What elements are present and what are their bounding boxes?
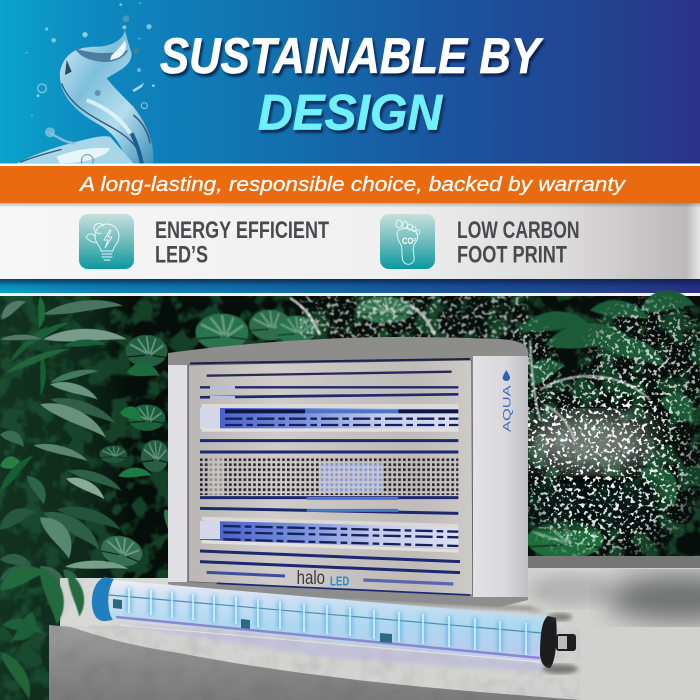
panel: features band <box>0 203 700 279</box>
icon: carbon footprint: CO² <box>402 236 416 246</box>
feature label: carbon: LOW CARBON <box>457 217 580 244</box>
feature label: energy: ENERGY EFFICIENT <box>155 217 329 244</box>
title <box>160 28 544 140</box>
product: halo LED fly trap <box>92 337 578 674</box>
foliage behind device top <box>195 296 528 350</box>
band drop shadow <box>0 279 700 293</box>
halo LED logo <box>297 568 350 589</box>
header banner background <box>0 0 700 296</box>
halo LED logo: LED <box>330 573 350 588</box>
tube body <box>109 580 547 663</box>
title: SUSTAINABLE BY <box>160 28 544 84</box>
icon: energy efficient bulb <box>79 214 134 269</box>
black end cap with connector <box>540 613 578 674</box>
photo: garden scene <box>0 286 700 700</box>
feature label: carbon <box>457 217 580 268</box>
perforated section <box>200 458 458 495</box>
product: LED tube <box>92 577 578 674</box>
tube LED glow <box>129 588 526 655</box>
tube reflection <box>110 622 542 672</box>
device shadow <box>168 585 545 612</box>
tube LED lines <box>129 588 526 655</box>
feature label: carbon: FOOT PRINT <box>457 242 567 268</box>
right foliage <box>518 286 700 558</box>
blue end cap <box>92 577 114 621</box>
upper light window <box>200 404 458 432</box>
device housing <box>168 337 528 607</box>
device grille panel <box>188 359 514 595</box>
title: DESIGN <box>258 84 443 140</box>
foreground leaves over ledge <box>0 558 90 699</box>
icon: carbon footprint <box>380 214 435 269</box>
feature label: energy <box>155 217 329 268</box>
subtitle: A long-lasting, responsible choice, backed by warranty <box>78 173 627 196</box>
halo LED logo: halo <box>297 568 325 589</box>
AQUA brand mark: AQUA <box>502 384 514 432</box>
AQUA brand mark <box>502 370 514 432</box>
tube electronics <box>113 599 392 643</box>
concrete ledge and ground <box>49 556 700 700</box>
panel: orange subtitle band <box>0 166 700 203</box>
white rule above photo <box>0 293 700 296</box>
white rule above orange band <box>0 164 700 166</box>
feature label: energy: LED’S <box>155 242 208 268</box>
left foliage <box>0 295 179 604</box>
lower light window <box>200 517 458 553</box>
icon: water splash <box>17 2 155 167</box>
water splash spray <box>510 296 700 556</box>
